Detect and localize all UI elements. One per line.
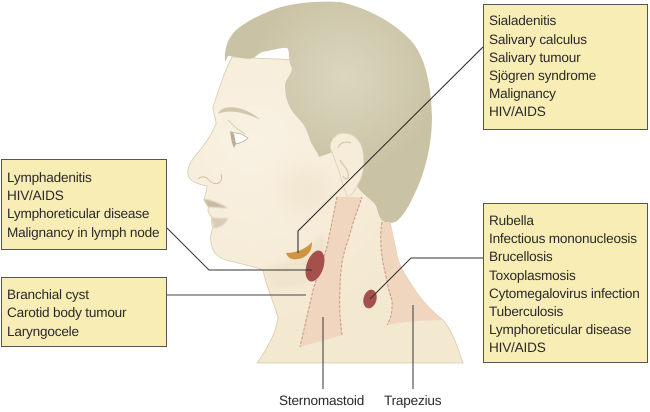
panel: infectious causes: Cytomegalovirus infection [489, 286, 640, 301]
shading under the jaw [265, 232, 332, 290]
panel: infectious causes: Rubella [489, 213, 534, 228]
leader: sternomastoid label [322, 317, 324, 389]
leader: infection box to node [370, 258, 483, 299]
posterior cervical lymph node [361, 288, 379, 310]
panel: infectious causes: HIV/AIDS [489, 340, 546, 355]
illustration: head and neck [188, 2, 463, 363]
panel: anterior neck causes [2, 278, 166, 346]
label: Sternomastoid: Sternomastoid [279, 393, 364, 408]
inner ear [338, 142, 351, 179]
panel: salivary causes: Salivary calculus [489, 32, 587, 47]
panel: infectious causes [484, 204, 648, 362]
panel: infectious causes: Tuberculosis [489, 304, 564, 319]
panel: salivary causes: Sjögren syndrome [489, 68, 596, 83]
panel: lymph node causes: HIV/AIDS [7, 188, 64, 203]
upper cervical lymph node [302, 248, 328, 284]
sternomastoid dashed edges [300, 197, 362, 347]
leader: trapezius label [412, 305, 414, 389]
cheek shading [279, 166, 331, 214]
sternomastoid muscle [300, 197, 362, 347]
leader: lymph node box to node [167, 228, 312, 270]
lips [204, 199, 228, 228]
panel: anterior neck causes: Laryngocele [7, 324, 79, 339]
panel: infectious causes: Lymphoreticular disease [489, 322, 631, 337]
panel: salivary causes: Malignancy [489, 86, 556, 101]
trapezius dashed edge [381, 222, 392, 325]
panel: salivary causes: HIV/AIDS [489, 104, 546, 119]
panel: lymph node causes: Lymphadenitis [7, 170, 92, 185]
label: Trapezius: Trapezius [384, 393, 442, 408]
leader: branchial box to neck [167, 294, 306, 296]
panel: anterior neck causes: Branchial cyst [7, 287, 89, 302]
ear [330, 133, 364, 196]
panel: lymph node causes [2, 160, 166, 250]
eyebrow [218, 107, 261, 120]
panel: salivary causes: Sialadenitis [489, 13, 557, 28]
panel: lymph node causes: Lymphoreticular disease [7, 206, 149, 221]
panel: infectious causes: Toxoplasmosis [489, 268, 576, 283]
head and neck skin [188, 57, 463, 363]
panel: lymph node causes: Malignancy in lymph node [7, 225, 159, 240]
panel: infectious causes: Brucellosis [489, 249, 553, 264]
panel: infectious causes: Infectious mononucleosis [489, 231, 637, 246]
eye [228, 120, 248, 148]
panel: salivary causes: Salivary tumour [489, 50, 581, 65]
salivary gland [286, 242, 312, 259]
leader: salivary box to gland [298, 47, 483, 253]
nostril [198, 174, 222, 184]
hair [225, 2, 432, 223]
leader lines [167, 47, 483, 389]
panel: anterior neck causes: Carotid body tumour [7, 305, 127, 320]
trapezius muscle [381, 222, 443, 325]
panel: salivary causes [484, 4, 648, 130]
